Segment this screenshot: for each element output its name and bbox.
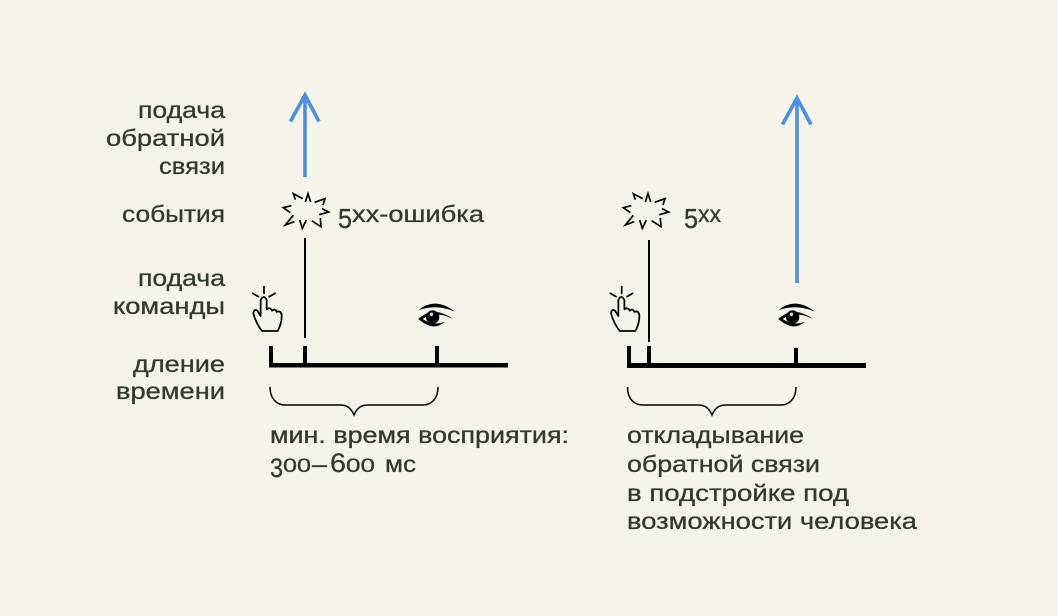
label: подача команды: команды xyxy=(113,293,225,319)
text: min perception time xyxy=(270,422,569,483)
text: 5xx: xx xyxy=(698,201,721,227)
text: min perception time: 3 xyxy=(270,453,283,483)
text: 5xx: 5 xyxy=(684,203,698,234)
text: deferred feedback: откладывание xyxy=(627,422,804,448)
text: deferred feedback: в подстройке под xyxy=(627,480,849,506)
label: подача команды: подача xyxy=(138,265,226,291)
panel: left diagram xyxy=(253,95,569,483)
error line xyxy=(304,238,306,338)
arrow: delayed feedback xyxy=(782,98,811,283)
label: подача обратной связи: связи xyxy=(159,153,225,179)
icon: eye xyxy=(418,304,455,326)
icon: error burst xyxy=(623,194,669,228)
row labels xyxy=(106,97,226,404)
label: события: события xyxy=(122,201,225,227)
text: deferred feedback: обратной связи xyxy=(627,451,820,477)
label: подача обратной связи: подача xyxy=(138,97,226,123)
error line xyxy=(648,240,650,342)
icon: hand xyxy=(610,287,639,331)
brace xyxy=(270,387,438,415)
label: дление времени xyxy=(116,351,225,404)
text: deferred feedback: возможности человека xyxy=(627,508,918,534)
text: min perception time: 6 xyxy=(330,448,346,478)
icon: eye xyxy=(778,304,815,326)
text: deferred feedback xyxy=(627,422,918,534)
label: дление времени: времени xyxy=(116,378,225,404)
icon: error burst xyxy=(283,194,329,228)
text: 5xx error: xx-ошибка xyxy=(352,201,485,227)
timeline xyxy=(627,346,866,368)
timeline xyxy=(269,346,508,368)
label: подача обратной связи xyxy=(106,97,226,179)
text: min perception time: 00 xyxy=(346,456,375,477)
text: 5xx error: 5 xyxy=(338,203,352,234)
text: min perception time: мс xyxy=(385,451,416,477)
label: подача обратной связи: обратной xyxy=(106,125,225,151)
icon: hand xyxy=(253,287,282,331)
text: min perception time: – xyxy=(312,451,328,477)
brace xyxy=(628,387,796,415)
label: подача команды xyxy=(113,265,226,319)
text: min perception time: мин. время восприятия: xyxy=(270,422,569,448)
panel: right diagram xyxy=(610,98,918,534)
label: дление времени: дление xyxy=(133,351,225,377)
text: min perception time: 00 xyxy=(283,456,311,477)
arrow: feedback xyxy=(290,95,319,177)
